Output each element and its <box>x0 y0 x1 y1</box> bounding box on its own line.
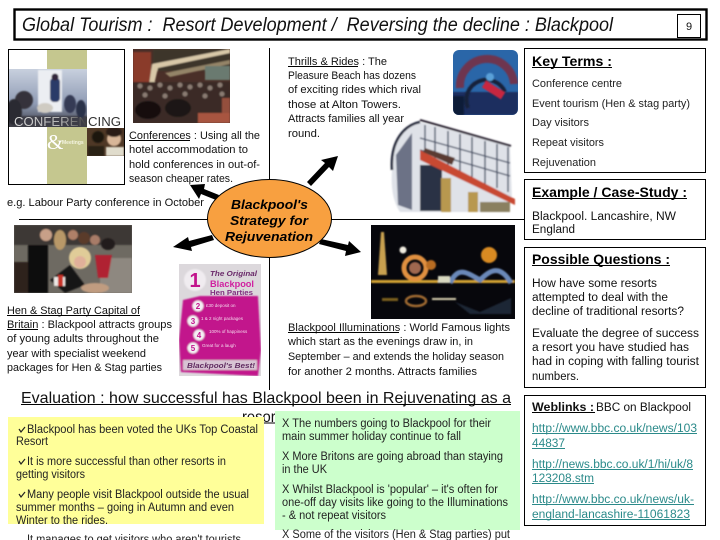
image: hen party group in limo <box>14 225 132 293</box>
panel: successes (yellow): summer months – going in Autumn and even <box>16 502 234 514</box>
panel: example case study: Blackpool. Lancashire, NW <box>532 211 676 223</box>
image: hen party poster <box>179 264 261 376</box>
panel: key terms: Day visitors <box>532 117 589 129</box>
text: thrills and rides <box>288 56 421 140</box>
image: hen party poster: The Original <box>210 271 258 278</box>
text: conferences <box>129 130 260 185</box>
text: conferences: hotel accommodation to <box>129 144 248 156</box>
image: hen party poster: 2 <box>196 302 201 311</box>
panel: weblinks: http://www.bbc.co.uk/news/103 <box>532 423 697 435</box>
central oval: strategy: Strategy for <box>230 213 309 228</box>
panel: weblinks: http://news.bbc.co.uk/1/hi/uk/8 <box>532 459 693 471</box>
image: hen party poster: 1 <box>189 270 201 292</box>
title bar <box>14 10 706 40</box>
text: hen and stag: Hen & Stag Party Capital of <box>7 305 141 317</box>
panel: possible questions: Evaluate the degree of success <box>532 328 699 340</box>
image: hen party poster: Blackpool <box>210 279 254 289</box>
evaluation heading: Evaluation : how successful has Blackpool been in Rejuvenating as a <box>21 390 511 407</box>
panel: possible questions: Possible Questions : <box>532 251 670 267</box>
image: hen party poster: Hen Parties <box>210 290 253 297</box>
central oval: strategy <box>208 180 332 258</box>
image: hen party poster: Great for a laugh <box>202 343 236 348</box>
image: conferencing and meetings cover: CONFERENCING <box>14 114 121 129</box>
title bar: Global Tourism : Resort Development / Reversing the decline : Blackpool <box>22 15 614 36</box>
panel: failures (green): one-off day visits like going to the Illuminations <box>282 497 508 509</box>
arrow: to conferences <box>190 184 219 200</box>
panel: failures (green): in the UK <box>282 464 327 476</box>
panel: failures (green): - & not repeat visitors <box>282 510 386 522</box>
panel: possible questions: attempted to deal with the <box>532 292 668 304</box>
text: thrills and rides: of exciting rides which rival <box>288 84 421 96</box>
panel: successes (yellow): It is more successful than other resorts in <box>27 456 226 468</box>
panel: weblinks: Weblinks : <box>532 400 594 414</box>
panel: successes (yellow): Many people visit Blackpool outside the usual <box>27 489 249 501</box>
text: conferences: season cheaper rates. <box>129 173 233 185</box>
panel: weblinks: england-lancashire-11061823 <box>532 509 690 521</box>
panel: key terms: Rejuvenation <box>532 157 596 169</box>
arrow: to illuminations <box>319 239 361 256</box>
image: conferencing and meetings cover <box>6 50 124 184</box>
panel: failures (green): X More Britons are going abroad than staying <box>282 451 503 463</box>
panel: successes (yellow): Winter to the rides. <box>16 515 108 527</box>
arrow: to hen and stag <box>173 235 214 251</box>
text: hen and stag: of young adults throughout the <box>7 333 159 345</box>
text: thrills and rides: Pleasure Beach has dozens <box>288 70 416 82</box>
image: conferencing and meetings cover: Meetings <box>62 140 84 146</box>
divider lines <box>19 48 524 390</box>
image: hen party poster: 100% of happiness <box>209 329 248 334</box>
panel: possible questions: a resort you have studied has <box>532 342 689 354</box>
text: conferences: Conferences : Using all the <box>129 130 260 142</box>
central oval: strategy: Rejuvenation <box>225 229 313 244</box>
text: hen and stag: packages for Hen & Stag parties <box>7 362 162 374</box>
page number box: 9 <box>686 21 692 33</box>
panel: weblinks: 44837 <box>532 438 565 450</box>
image: hen party poster: 1 & 2 night packages <box>201 316 244 321</box>
panel: weblinks <box>524 396 706 526</box>
image: roller coaster <box>392 120 515 212</box>
text: conferences: hold conferences in out-of- <box>129 159 260 171</box>
panel: key terms: Conference centre <box>532 78 622 90</box>
central oval: strategy: Blackpool's <box>231 197 308 212</box>
text: blackpool illuminations: which start as the evenings draw in, in <box>287 336 473 348</box>
panel: successes (yellow): Blackpool has been voted the UKs Top Coastal <box>27 424 258 436</box>
panel: failures (green): main summer holiday continue to fall <box>282 431 461 443</box>
image: conferencing and meetings cover: & <box>47 130 63 154</box>
panel: possible questions: How have some resorts <box>532 278 657 290</box>
evaluation heading: resort? <box>242 409 288 426</box>
panel: weblinks: http://www.bbc.co.uk/news/uk- <box>532 494 694 506</box>
panel: key terms: Repeat visitors <box>532 137 604 149</box>
text: blackpool illuminations: September – and extends the holiday season <box>288 351 504 363</box>
text: thrills and rides: those at Alton Towers. <box>288 99 401 111</box>
panel: example case study: Example / Case-Study : <box>532 184 687 200</box>
image: blackpool illuminations <box>371 225 515 319</box>
panel: key terms <box>524 48 706 172</box>
page number box <box>678 14 700 38</box>
panel: failures (green) <box>275 411 520 540</box>
panel: successes (yellow) <box>8 417 264 540</box>
image: hen party poster: 5 <box>191 344 196 353</box>
text: thrills and rides: Attracts families all year <box>288 113 404 125</box>
panel: example case study: England <box>532 224 575 236</box>
panel: possible questions: numbers. <box>532 371 579 383</box>
panel: key terms: Event tourism (Hen & stag party) <box>532 98 690 110</box>
image: hen party poster: 4 <box>197 331 202 340</box>
image: hen party poster: Blackpool's Best! <box>187 363 256 370</box>
panel: possible questions: had in coping with falling tourist <box>532 356 700 368</box>
text: conference example: e.g. Labour Party conference in October <box>7 197 204 209</box>
evaluation heading <box>21 390 511 426</box>
panel: possible questions <box>524 248 706 388</box>
text: thrills and rides: round. <box>288 128 320 140</box>
image: hen party poster: £30 deposit on <box>206 303 236 308</box>
text: thrills and rides: Thrills & Rides : The <box>288 56 387 68</box>
panel: example case study <box>524 180 706 240</box>
text: blackpool illuminations <box>287 322 510 378</box>
panel: successes (yellow): getting visitors <box>16 469 85 481</box>
text: hen and stag: year with specialist weekend <box>7 348 146 360</box>
image: conference hall audience <box>133 49 230 123</box>
text: blackpool illuminations: Blackpool Illuminations : World Famous lights <box>288 322 510 334</box>
panel: weblinks: 123208.stm <box>532 473 594 485</box>
arrow: to thrills and rides <box>307 156 338 186</box>
text: hen and stag <box>7 305 173 374</box>
panel: possible questions: decline of traditional resorts? <box>532 306 684 318</box>
text: hen and stag: Britain : Blackpool attracts groups <box>7 319 173 331</box>
panel: failures (green): X Whilst Blackpool is 'popular' – it's often for <box>282 484 498 496</box>
panel: key terms: Key Terms : <box>532 53 612 69</box>
image: pleasure beach sign <box>453 50 518 115</box>
panel: failures (green): X The numbers going to Blackpool for their <box>282 418 491 430</box>
panel: weblinks: BBC on Blackpool <box>596 402 691 414</box>
image: hen party poster: 3 <box>191 317 196 326</box>
text: blackpool illuminations: for another 2 months. Attracts families <box>288 366 478 378</box>
panel: successes (yellow): Resort <box>16 436 49 448</box>
